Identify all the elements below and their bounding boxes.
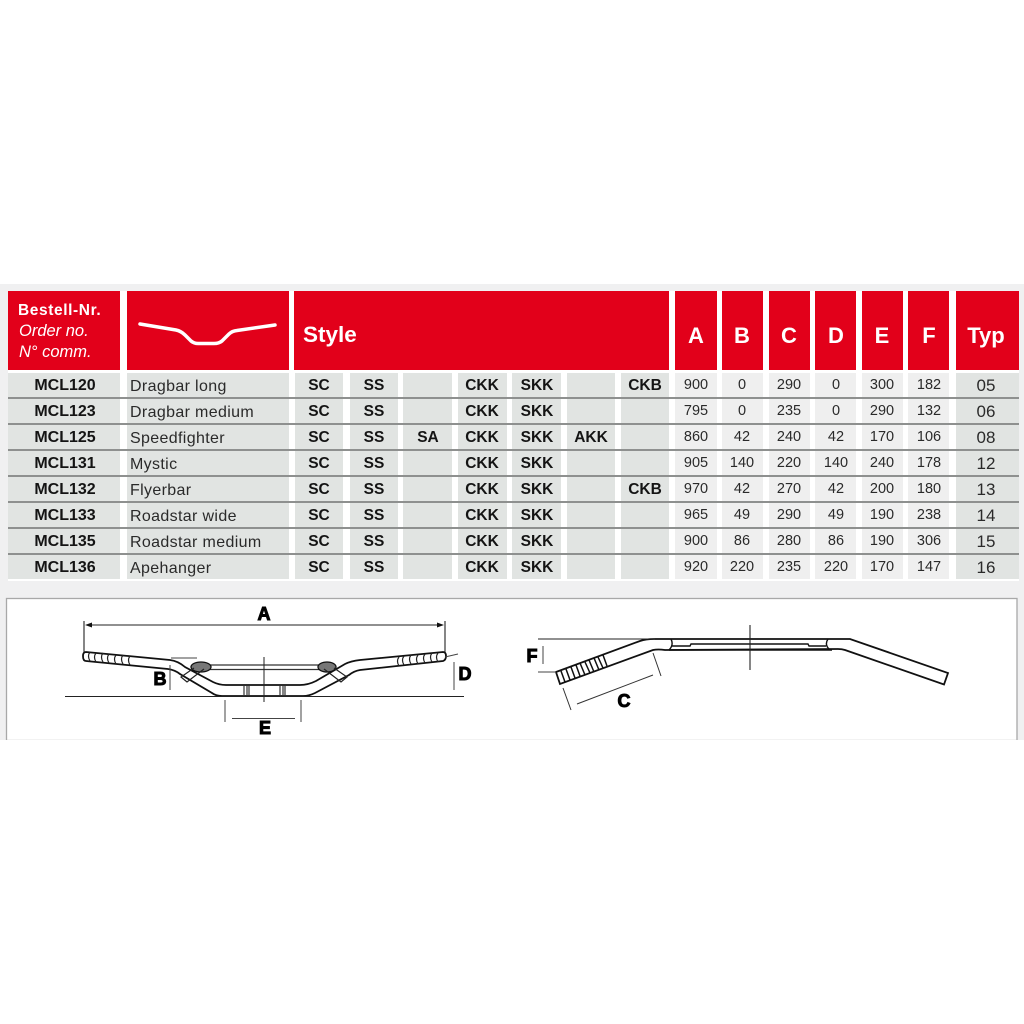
table header row: B (734, 323, 750, 348)
row 7 MCL135: 86 (734, 533, 750, 549)
row 8 MCL136: 220 (730, 559, 754, 575)
table header row: Style (303, 322, 357, 347)
row 5 MCL132: 13 (977, 480, 995, 499)
row 2 MCL123: 132 (917, 403, 941, 419)
row 8 MCL136: 220 (824, 559, 848, 575)
row 8 MCL136 (8, 555, 1019, 579)
dimension E: E (259, 718, 271, 738)
side view handlebar drawing (526, 625, 948, 711)
row 6 MCL133: Roadstar wide (130, 508, 237, 525)
table header row: D (828, 323, 844, 348)
row 7 MCL135: Roadstar medium (130, 534, 262, 551)
row 5 MCL132: 200 (870, 481, 894, 497)
row 8 MCL136: Apehanger (130, 560, 212, 577)
row 1 MCL120: 0 (738, 377, 746, 393)
row 2 MCL123: 290 (870, 403, 894, 419)
row 6 MCL133 (8, 503, 1019, 527)
row 4 MCL131: 220 (777, 455, 801, 471)
row 3 MCL125: 106 (917, 429, 941, 445)
row 2 MCL123: 0 (738, 403, 746, 419)
row 6 MCL133: 49 (828, 507, 844, 523)
dimension B (154, 658, 197, 690)
table header row: N° comm. (19, 343, 92, 361)
row 7 MCL135: 15 (977, 532, 995, 551)
table panel (8, 291, 1019, 581)
row 6 MCL133: 49 (734, 507, 750, 523)
row 7 MCL135: 280 (777, 533, 801, 549)
row 8 MCL136: CKK (465, 559, 500, 576)
row 6 MCL133: 14 (977, 506, 995, 525)
row 5 MCL132: Flyerbar (130, 482, 192, 499)
row 3 MCL125: MCL125 (34, 429, 96, 446)
row 8 MCL136: MCL136 (34, 559, 96, 576)
row 5 MCL132: SKK (521, 481, 554, 498)
row 2 MCL123: CKK (465, 403, 500, 420)
row 4 MCL131: 140 (730, 455, 754, 471)
row 2 MCL123: 06 (977, 402, 995, 421)
table header row: F (922, 323, 936, 348)
row 2 MCL123: MCL123 (34, 403, 96, 420)
table header row: C (781, 323, 797, 348)
row 1 MCL120: CKK (465, 377, 500, 394)
row 3 MCL125: Speedfighter (130, 430, 225, 447)
row 3 MCL125: AKK (574, 429, 609, 446)
dimension A (84, 604, 445, 652)
row 4 MCL131: SS (364, 455, 384, 472)
dimension C: C (618, 691, 630, 711)
row 7 MCL135: CKK (465, 533, 500, 550)
panel: dimension diagrams (0, 598, 1024, 750)
row 7 MCL135: 86 (828, 533, 844, 549)
row 3 MCL125 (8, 425, 1019, 449)
row 4 MCL131: 140 (824, 455, 848, 471)
row 6 MCL133: SC (308, 507, 330, 524)
row 5 MCL132: MCL132 (34, 481, 96, 498)
row 1 MCL120: 182 (917, 377, 941, 393)
row 8 MCL136: 170 (870, 559, 894, 575)
row 3 MCL125: CKK (465, 429, 500, 446)
front view handlebar drawing (65, 604, 472, 738)
row 3 MCL125: 860 (684, 429, 708, 445)
row 6 MCL133: SKK (521, 507, 554, 524)
row 5 MCL132: 180 (917, 481, 941, 497)
row 1 MCL120: 290 (777, 377, 801, 393)
row 3 MCL125: 42 (734, 429, 750, 445)
row 1 MCL120: SKK (521, 377, 554, 394)
row 5 MCL132: 42 (734, 481, 750, 497)
row 5 MCL132: CKK (465, 481, 500, 498)
row 5 MCL132: 270 (777, 481, 801, 497)
row 5 MCL132: SC (308, 481, 330, 498)
row 4 MCL131 (8, 451, 1019, 475)
row 3 MCL125: 170 (870, 429, 894, 445)
dimension D (445, 654, 472, 690)
row 7 MCL135 (8, 529, 1019, 553)
row 4 MCL131: SC (308, 455, 330, 472)
row 7 MCL135: SC (308, 533, 330, 550)
dimension D: D (458, 664, 472, 684)
row 3 MCL125: 42 (828, 429, 844, 445)
row 2 MCL123: Dragbar medium (130, 404, 254, 421)
row 8 MCL136: SS (364, 559, 384, 576)
row 8 MCL136: 147 (917, 559, 941, 575)
dimension C (563, 653, 661, 711)
row 4 MCL131: SKK (521, 455, 554, 472)
dimension A: A (258, 604, 270, 624)
row 8 MCL136: SC (308, 559, 330, 576)
page background band (0, 284, 1024, 740)
row 1 MCL120: SS (364, 377, 384, 394)
row 3 MCL125: SS (364, 429, 384, 446)
table header row (8, 291, 1019, 370)
row 3 MCL125: SKK (521, 429, 554, 446)
row 5 MCL132: SS (364, 481, 384, 498)
table header row: Typ (967, 323, 1005, 348)
row 4 MCL131: 12 (977, 454, 995, 473)
row 6 MCL133: 965 (684, 507, 708, 523)
table header row: Bestell-Nr. (18, 302, 101, 319)
row 5 MCL132: 42 (828, 481, 844, 497)
row 2 MCL123: SS (364, 403, 384, 420)
row 1 MCL120: CKB (628, 377, 662, 394)
row 2 MCL123: 795 (684, 403, 708, 419)
row 4 MCL131: 905 (684, 455, 708, 471)
row 8 MCL136: 920 (684, 559, 708, 575)
row 2 MCL123: 235 (777, 403, 801, 419)
row 6 MCL133: CKK (465, 507, 500, 524)
row 7 MCL135: SKK (521, 533, 554, 550)
row 3 MCL125: 08 (977, 428, 995, 447)
row 8 MCL136: SKK (521, 559, 554, 576)
dimension E (225, 700, 301, 738)
row 2 MCL123 (8, 399, 1019, 423)
row 5 MCL132 (8, 477, 1019, 501)
row 1 MCL120: MCL120 (34, 377, 96, 394)
row 7 MCL135: MCL135 (34, 533, 96, 550)
row 8 MCL136: 235 (777, 559, 801, 575)
dimension F: F (526, 646, 538, 666)
row 6 MCL133: SS (364, 507, 384, 524)
row 1 MCL120: 900 (684, 377, 708, 393)
row 1 MCL120: SC (308, 377, 330, 394)
row 5 MCL132: CKB (628, 481, 662, 498)
row 4 MCL131: CKK (465, 455, 500, 472)
row 6 MCL133: 190 (870, 507, 894, 523)
row 4 MCL131: Mystic (130, 456, 177, 473)
row 2 MCL123: 0 (832, 403, 840, 419)
row 3 MCL125: SC (308, 429, 330, 446)
row 6 MCL133: MCL133 (34, 507, 96, 524)
row 1 MCL120: 0 (832, 377, 840, 393)
row 4 MCL131: 178 (917, 455, 941, 471)
row 7 MCL135: 900 (684, 533, 708, 549)
dimension B: B (154, 669, 166, 689)
dimension F (526, 646, 556, 672)
row 2 MCL123: SKK (521, 403, 554, 420)
row 1 MCL120: 300 (870, 377, 894, 393)
row 7 MCL135: SS (364, 533, 384, 550)
row 7 MCL135: 306 (917, 533, 941, 549)
table header row: A (688, 323, 704, 348)
row 1 MCL120: 05 (977, 376, 995, 395)
row 3 MCL125: SA (417, 429, 439, 446)
row 1 MCL120 (8, 373, 1019, 397)
table header row: E (875, 323, 889, 348)
row 2 MCL123: SC (308, 403, 330, 420)
row 7 MCL135: 190 (870, 533, 894, 549)
row 6 MCL133: 238 (917, 507, 941, 523)
row 3 MCL125: 240 (777, 429, 801, 445)
row 4 MCL131: 240 (870, 455, 894, 471)
row 8 MCL136: 16 (977, 558, 995, 577)
row 4 MCL131: MCL131 (34, 455, 96, 472)
row 1 MCL120: Dragbar long (130, 378, 227, 395)
row 6 MCL133: 290 (777, 507, 801, 523)
row 5 MCL132: 970 (684, 481, 708, 497)
table header row: Order no. (19, 322, 89, 340)
